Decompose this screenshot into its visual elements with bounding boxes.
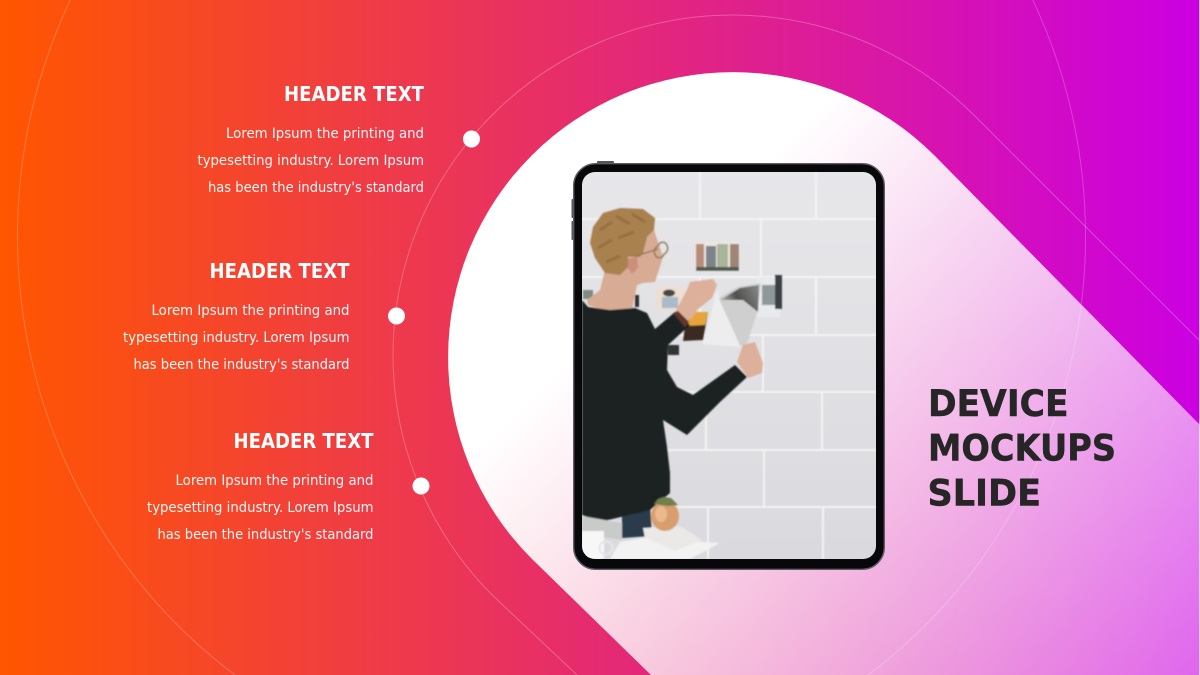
desk — [610, 538, 720, 559]
white mug — [582, 531, 612, 559]
body 3: has been the industry's standard — [158, 526, 374, 543]
right edge strip — [1199, 0, 1200, 675]
timeline dot 2 — [388, 308, 405, 324]
heading 3: HEADER TEXT — [234, 429, 374, 453]
pinned photos — [583, 242, 782, 355]
man: dark sweater — [582, 300, 747, 522]
held paper — [703, 283, 761, 347]
body 3: Lorem Ipsum the printing and — [176, 472, 374, 489]
box on table — [582, 516, 622, 540]
body 3 — [147, 472, 374, 543]
photo on screen — [582, 172, 876, 559]
books — [643, 526, 702, 551]
slide title — [928, 382, 1116, 514]
man: ear — [628, 257, 638, 274]
tablet body — [574, 164, 884, 569]
man: skin — [587, 230, 663, 313]
side buttons — [572, 161, 614, 240]
text block 3 — [147, 429, 374, 543]
slide title: MOCKUPS — [928, 426, 1116, 470]
body 2 — [123, 302, 350, 373]
slide title: DEVICE — [928, 382, 1068, 425]
plant pot — [651, 497, 679, 531]
man: hair — [590, 208, 655, 275]
large white blob shape — [448, 72, 1200, 675]
sleeve cuff — [673, 311, 689, 327]
timeline dot 3 — [412, 478, 430, 494]
text block 2 — [123, 259, 350, 373]
man: lower hand — [737, 342, 763, 378]
body 1: typesetting industry. Lorem Ipsum — [198, 152, 424, 169]
body 1 — [198, 125, 424, 196]
tablet device mockup — [572, 161, 884, 569]
man: glasses — [636, 242, 668, 258]
slide title: SLIDE — [928, 472, 1041, 514]
body 1: Lorem Ipsum the printing and — [226, 125, 424, 142]
timeline dot 1 — [463, 130, 480, 148]
thin inner stadium outline — [393, 15, 1200, 675]
text block 1 — [198, 82, 424, 196]
man: upper hand — [675, 279, 717, 322]
body 2: Lorem Ipsum the printing and — [152, 302, 350, 319]
man: jeans — [622, 505, 652, 538]
heading 2: HEADER TEXT — [210, 259, 350, 283]
brick wall — [582, 172, 876, 559]
body 1: has been the industry's standard — [208, 179, 424, 196]
heading 1: HEADER TEXT — [284, 82, 424, 106]
body 3: typesetting industry. Lorem Ipsum — [147, 499, 374, 516]
body 2: has been the industry's standard — [134, 356, 350, 373]
body 2: typesetting industry. Lorem Ipsum — [123, 329, 350, 346]
